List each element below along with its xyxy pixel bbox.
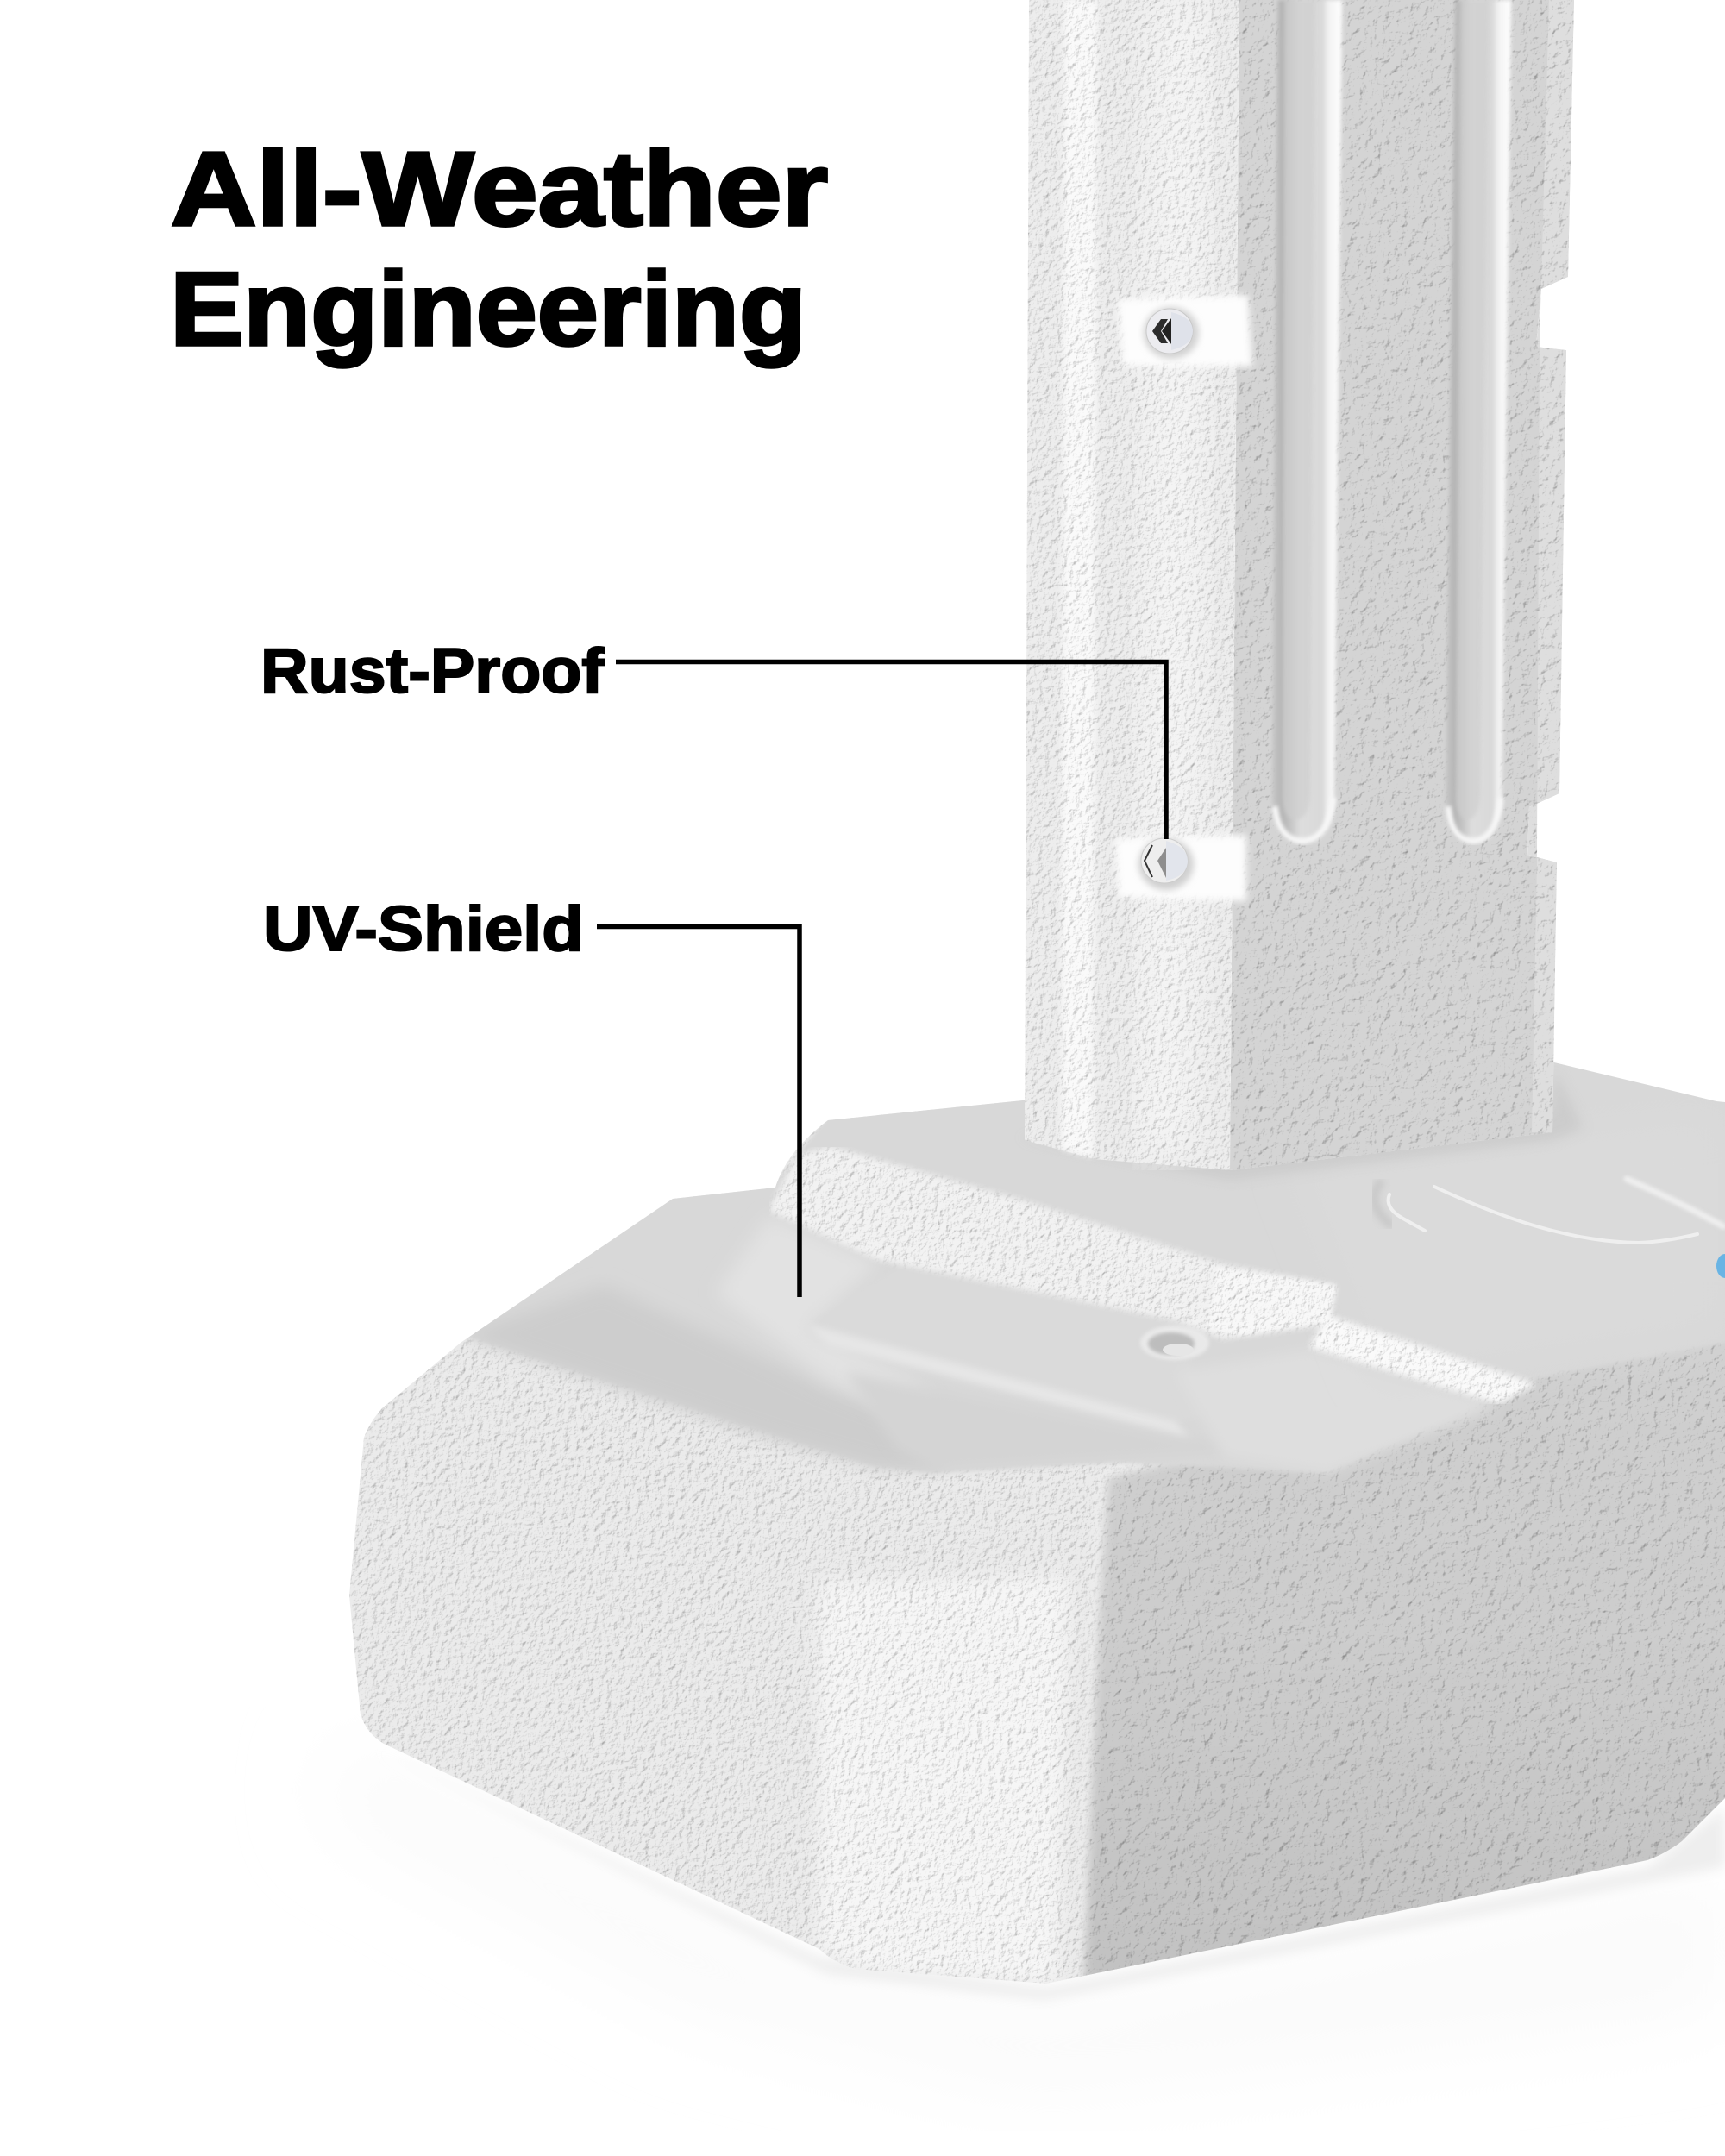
base: top surface [461, 1057, 1725, 1473]
base: left and corner faces [349, 1101, 1176, 1984]
base: raised rib [769, 1147, 1536, 1404]
post: contact shadow [1018, 1069, 1583, 1180]
post: front-left body [1025, 0, 1239, 1170]
base: dark shelf edge [474, 1294, 907, 1473]
post: right body [1230, 0, 1574, 1170]
base: side hole [1140, 1326, 1209, 1360]
post: right tab [1527, 0, 1574, 1132]
post: front-left face [1025, 0, 1239, 1170]
post: right groove [1446, 0, 1511, 843]
upper bolt notch [1118, 295, 1252, 367]
embossed logo [1374, 1179, 1723, 1243]
post: left groove rim [1275, 798, 1333, 841]
base: corner highlight [819, 1578, 1070, 1984]
title: Engineering [170, 250, 806, 367]
post: right face [1230, 0, 1574, 1170]
post: left groove inner channel [1283, 0, 1315, 819]
base: recess step band [819, 1330, 1182, 1433]
base: upper platform shade [1654, 1347, 1713, 1361]
icon: upper bolt head [1144, 307, 1199, 359]
blue mark [1716, 1254, 1725, 1278]
base: shelf centre fade [731, 1230, 866, 1378]
base: right face [1078, 1341, 1725, 1977]
post: white highlight strip [1062, 0, 1097, 1157]
base: rib block [1208, 1268, 1336, 1335]
base: strip between hole and corner [1309, 1402, 1494, 1476]
callout: rust-proof: Rust-Proof [260, 636, 605, 706]
base: rib extension [1309, 1315, 1536, 1404]
post: right groove inner channel [1456, 0, 1489, 819]
title [170, 130, 828, 367]
title: All-Weather [171, 130, 828, 248]
ground shadow [328, 1742, 1725, 2096]
post: left groove [1272, 0, 1342, 843]
icon: lower bolt head [1138, 838, 1194, 890]
product base block [328, 1052, 1725, 2018]
product post [1018, 0, 1583, 1180]
base: front lip panel [856, 1376, 937, 1420]
callout: rust-proof [260, 636, 1166, 839]
lower bolt notch [1115, 835, 1246, 901]
callout: uv-shield [263, 894, 800, 1297]
base: recessed panel [806, 1265, 1208, 1423]
callout: uv-shield: UV-Shield [263, 894, 584, 964]
post: right groove rim [1448, 798, 1501, 841]
